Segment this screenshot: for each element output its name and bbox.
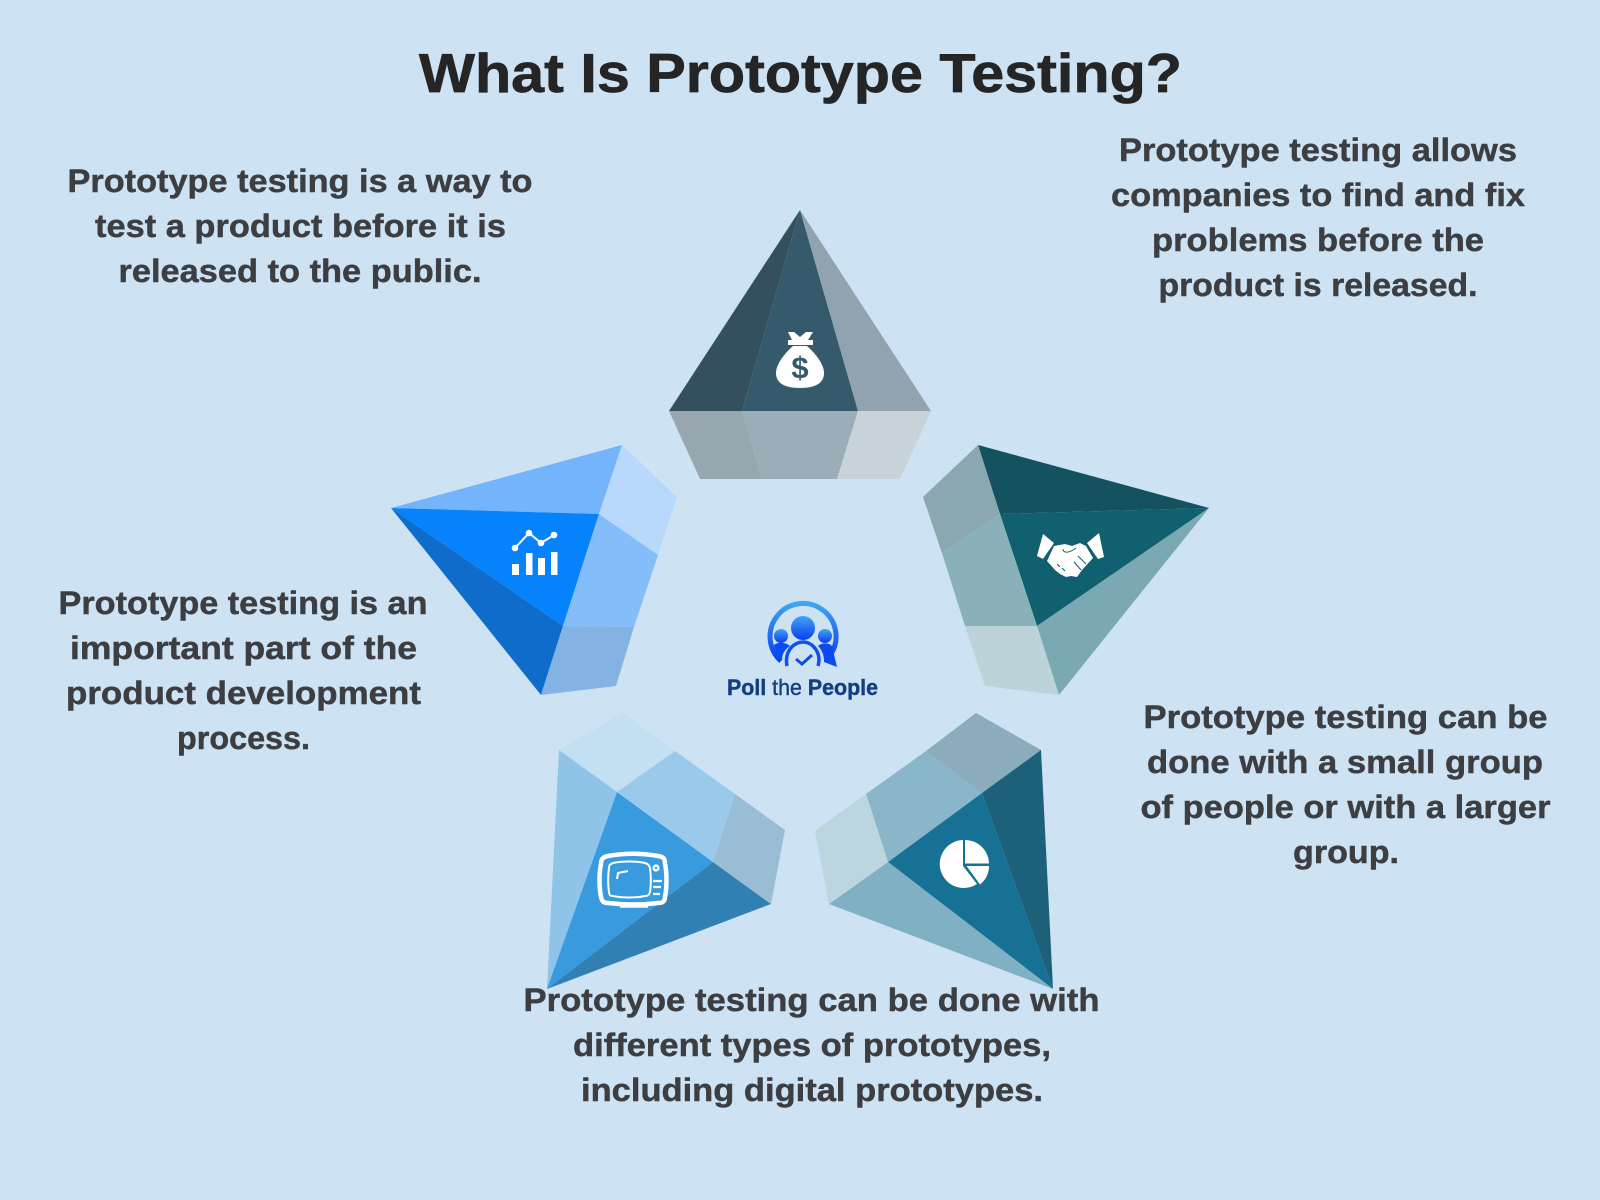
gem: right, handshake xyxy=(923,445,1209,695)
text block: bottom xyxy=(524,982,1100,1108)
gem: bottom right, pie chart xyxy=(815,713,1053,989)
text block: bottom: including digital prototypes. xyxy=(581,1072,1043,1108)
logo: Poll the People xyxy=(727,603,878,700)
text block: top left: test a product before it is xyxy=(95,208,506,244)
text block: top left xyxy=(68,163,532,289)
text block: middle right xyxy=(1140,699,1551,870)
icon: television xyxy=(600,854,666,907)
text block: bottom: different types of prototypes, xyxy=(573,1027,1051,1063)
icon: handshake xyxy=(1037,533,1104,577)
text block: middle left: Prototype testing is an xyxy=(58,585,428,621)
text block: middle left: important part of the xyxy=(70,630,417,666)
logo wordmark: Poll the People xyxy=(727,675,878,700)
text block: middle right: of people or with a larger xyxy=(1140,789,1551,825)
text block: top left: Prototype testing is a way to xyxy=(68,163,532,199)
text block: top left: released to the public. xyxy=(118,253,481,289)
gem: top, money xyxy=(669,210,931,479)
text block: top right: companies to find and fix xyxy=(1111,177,1525,213)
icon: money bag: $ xyxy=(791,350,809,385)
text block: middle left: product development xyxy=(66,675,421,711)
title: What Is Prototype Testing? xyxy=(419,42,1182,104)
icon: pie chart xyxy=(940,840,989,888)
text block: top right: Prototype testing allows xyxy=(1119,132,1517,168)
text block: middle right: group. xyxy=(1293,834,1399,870)
text block: top right: problems before the xyxy=(1152,222,1484,258)
gem: left, chart xyxy=(391,445,677,695)
text block: top right xyxy=(1111,132,1525,303)
text block: middle right: done with a small group xyxy=(1147,744,1543,780)
text block: middle right: Prototype testing can be xyxy=(1144,699,1548,735)
icon: money bag xyxy=(776,332,824,388)
text block: middle left: process. xyxy=(177,720,310,756)
icon: line and bar chart xyxy=(512,530,558,575)
text block: middle left xyxy=(58,585,428,756)
text block: top right: product is released. xyxy=(1158,267,1478,303)
logo mark xyxy=(770,603,837,667)
text block: bottom: Prototype testing can be done with xyxy=(524,982,1100,1018)
gem: bottom left, television xyxy=(547,713,785,989)
